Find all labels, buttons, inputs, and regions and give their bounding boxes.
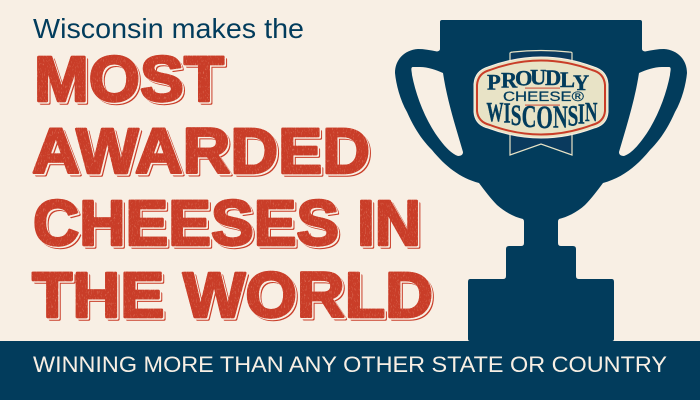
badge word: cheese: CHEESE®: [503, 89, 584, 104]
badge word: wisconsin: O: [536, 98, 553, 135]
icon: trophy: [395, 20, 687, 341]
badge word: wisconsin: N: [585, 97, 598, 127]
badge word: wisconsin: N: [553, 99, 568, 135]
badge red outline: [477, 60, 605, 134]
badge word: wisconsin: I: [578, 100, 585, 131]
footer band: [0, 341, 700, 400]
intro text: Wisconsin makes the: [33, 13, 304, 44]
red rule lower: [525, 104, 560, 106]
logo badge: Proudly Cheese Wisconsin: [474, 50, 608, 155]
headline line: most: MOST: [34, 43, 224, 115]
badge word: wisconsin: [486, 97, 598, 135]
badge plate: [474, 57, 608, 138]
badge word: wisconsin: S: [511, 100, 521, 132]
badge word: wisconsin: W: [486, 97, 504, 127]
footer text: WINNING MORE THAN ANY OTHER STATE OR COUNTRY: [33, 352, 667, 377]
badge word: wisconsin: S: [568, 100, 578, 133]
badge word: wisconsin: I: [504, 99, 511, 130]
ribbon: [510, 50, 572, 155]
headline: [32, 43, 433, 331]
red rule upper: [525, 88, 560, 89]
headline line: awarded: AWARDED: [32, 115, 370, 187]
badge word: proudly: PROUDLY: [487, 64, 589, 95]
badge word: wisconsin: C: [522, 98, 536, 134]
headline line: cheeses in: CHEESES IN: [33, 187, 421, 259]
headline line: the world: THE WORLD: [32, 259, 433, 331]
